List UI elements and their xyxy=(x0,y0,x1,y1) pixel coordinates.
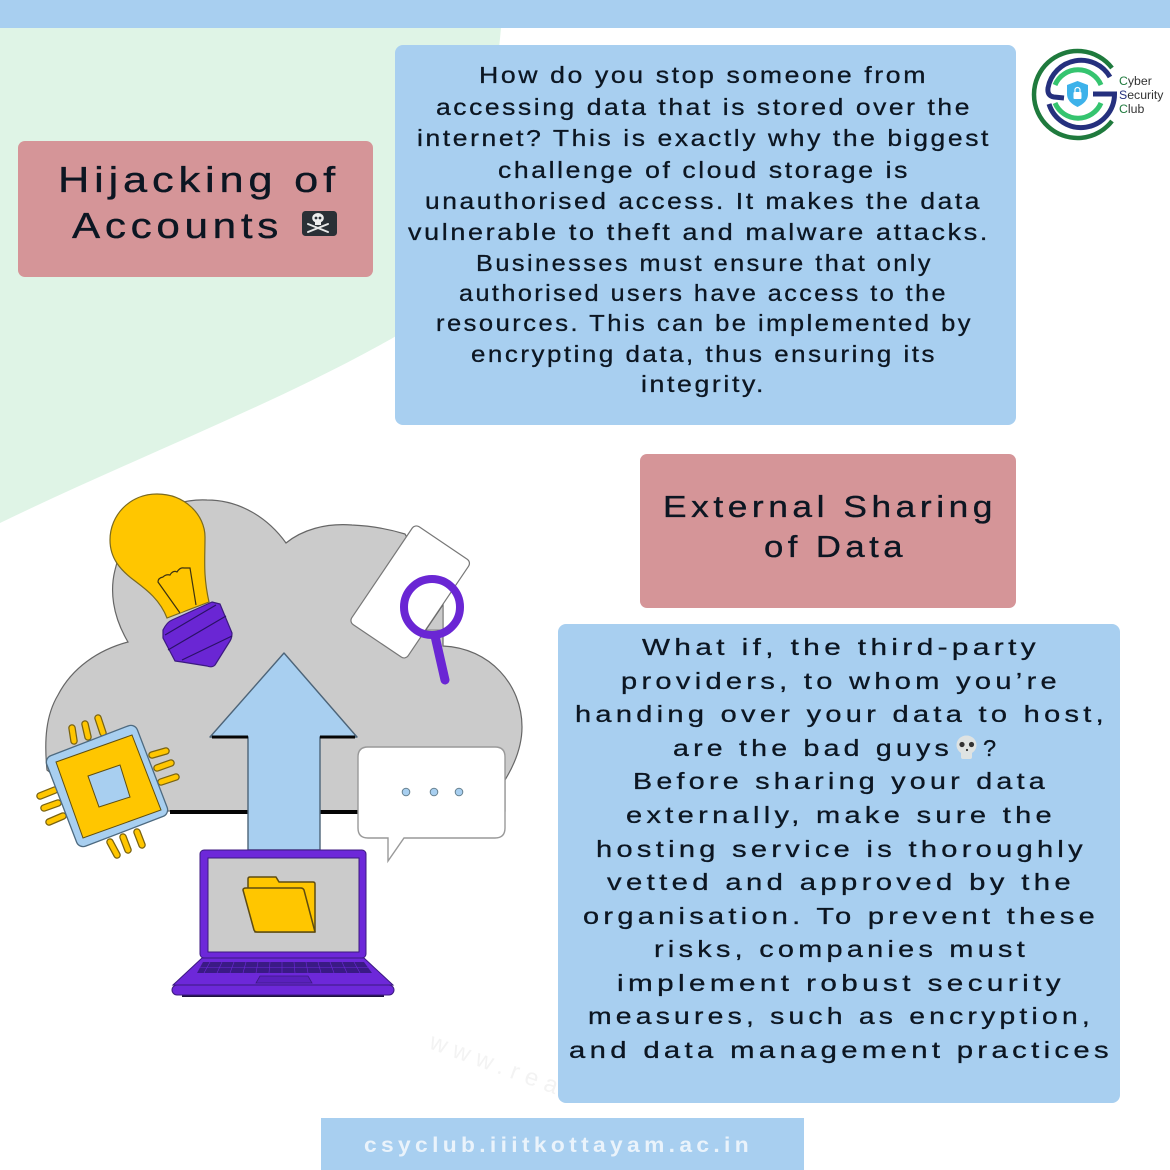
panel: unauthorised access explanation: unauthorised access. It makes the data xyxy=(425,188,982,214)
footer: website address: csyclub.iiitkottayam.ac.in xyxy=(364,1134,753,1157)
panel: unauthorised access explanation: encrypting data, thus ensuring its xyxy=(471,341,937,367)
heading: External Sharing of Data: of Data xyxy=(764,529,907,564)
panel: unauthorised access explanation: resources. This can be implemented by xyxy=(436,310,973,336)
icon: skull and crossbones xyxy=(302,211,337,236)
panel: third-party sharing explanation: risks, companies must xyxy=(654,936,1029,962)
background: mint green curved shape xyxy=(0,28,501,523)
panel: third-party sharing explanation: ? xyxy=(983,735,1000,761)
panel: unauthorised access explanation: challenge of cloud storage is xyxy=(498,157,910,183)
icon: magnifying glass xyxy=(404,579,460,680)
panel: unauthorised access explanation: accessing data that is stored over the xyxy=(436,94,972,120)
cloud base line xyxy=(170,810,360,814)
logo: Cyber Security Club: Club xyxy=(1119,102,1144,116)
panel: third-party sharing explanation: Before sharing your data xyxy=(633,768,1049,794)
panel: unauthorised access explanation: authorised users have access to the xyxy=(459,280,948,306)
icon: folder xyxy=(243,877,315,932)
illustration: cloud upload with laptop xyxy=(40,494,522,997)
heading: External Sharing of Data xyxy=(640,454,1016,608)
laptop xyxy=(172,850,394,997)
panel: third-party sharing explanation: vetted and approved by the xyxy=(607,869,1075,895)
panel: third-party sharing explanation: handing over your data to host, xyxy=(575,701,1108,727)
logo: Cyber Security Club: Security xyxy=(1119,88,1164,102)
panel: unauthorised access explanation: integrity. xyxy=(641,371,766,397)
panel: third-party sharing explanation: implement robust security xyxy=(617,970,1065,996)
panel: third-party sharing explanation: What if, the third-party xyxy=(642,634,1040,660)
icon: skull xyxy=(956,736,976,759)
panel: third-party sharing explanation: organisation. To prevent these xyxy=(583,903,1099,929)
panel: third-party sharing explanation: providers, to whom you’re xyxy=(621,668,1061,694)
heading: Hijacking of Accounts: Accounts xyxy=(72,205,283,246)
icon: light bulb xyxy=(110,494,232,667)
logo: Cyber Security Club: Cyber xyxy=(1119,74,1152,88)
panel: third-party sharing explanation xyxy=(558,624,1120,1103)
cloud xyxy=(46,500,522,811)
panel: unauthorised access explanation: How do you stop someone from xyxy=(479,62,928,88)
speech bubble xyxy=(358,747,505,861)
logo: Cyber Security Club xyxy=(1034,51,1164,138)
panel: unauthorised access explanation: internet? This is exactly why the biggest xyxy=(417,125,991,151)
top banner bar xyxy=(0,0,1170,28)
heading: Hijacking of Accounts: Hijacking of xyxy=(58,159,340,200)
panel: third-party sharing explanation: are the bad guys xyxy=(673,735,953,761)
heading: External Sharing of Data: External Sharing xyxy=(663,489,997,524)
panel: third-party sharing explanation: and data management practices xyxy=(569,1037,1113,1063)
lens background xyxy=(426,605,443,630)
panel: unauthorised access explanation: Businesses must ensure that only xyxy=(476,250,933,276)
watermark: www.rea xyxy=(425,1028,563,1100)
icon: paper card xyxy=(349,524,471,660)
panel: third-party sharing explanation: measures, such as encryption, xyxy=(588,1003,1094,1029)
panel: unauthorised access explanation xyxy=(395,45,1016,425)
panel: third-party sharing explanation: externally, make sure the xyxy=(626,802,1056,828)
panel: unauthorised access explanation: vulnerable to theft and malware attacks. xyxy=(408,219,990,245)
heading: Hijacking of Accounts xyxy=(18,141,373,277)
footer: website address xyxy=(321,1118,804,1170)
panel: third-party sharing explanation: hosting service is thoroughly xyxy=(596,836,1087,862)
arrow: upload xyxy=(210,653,357,850)
icon: processor chip xyxy=(40,718,176,855)
